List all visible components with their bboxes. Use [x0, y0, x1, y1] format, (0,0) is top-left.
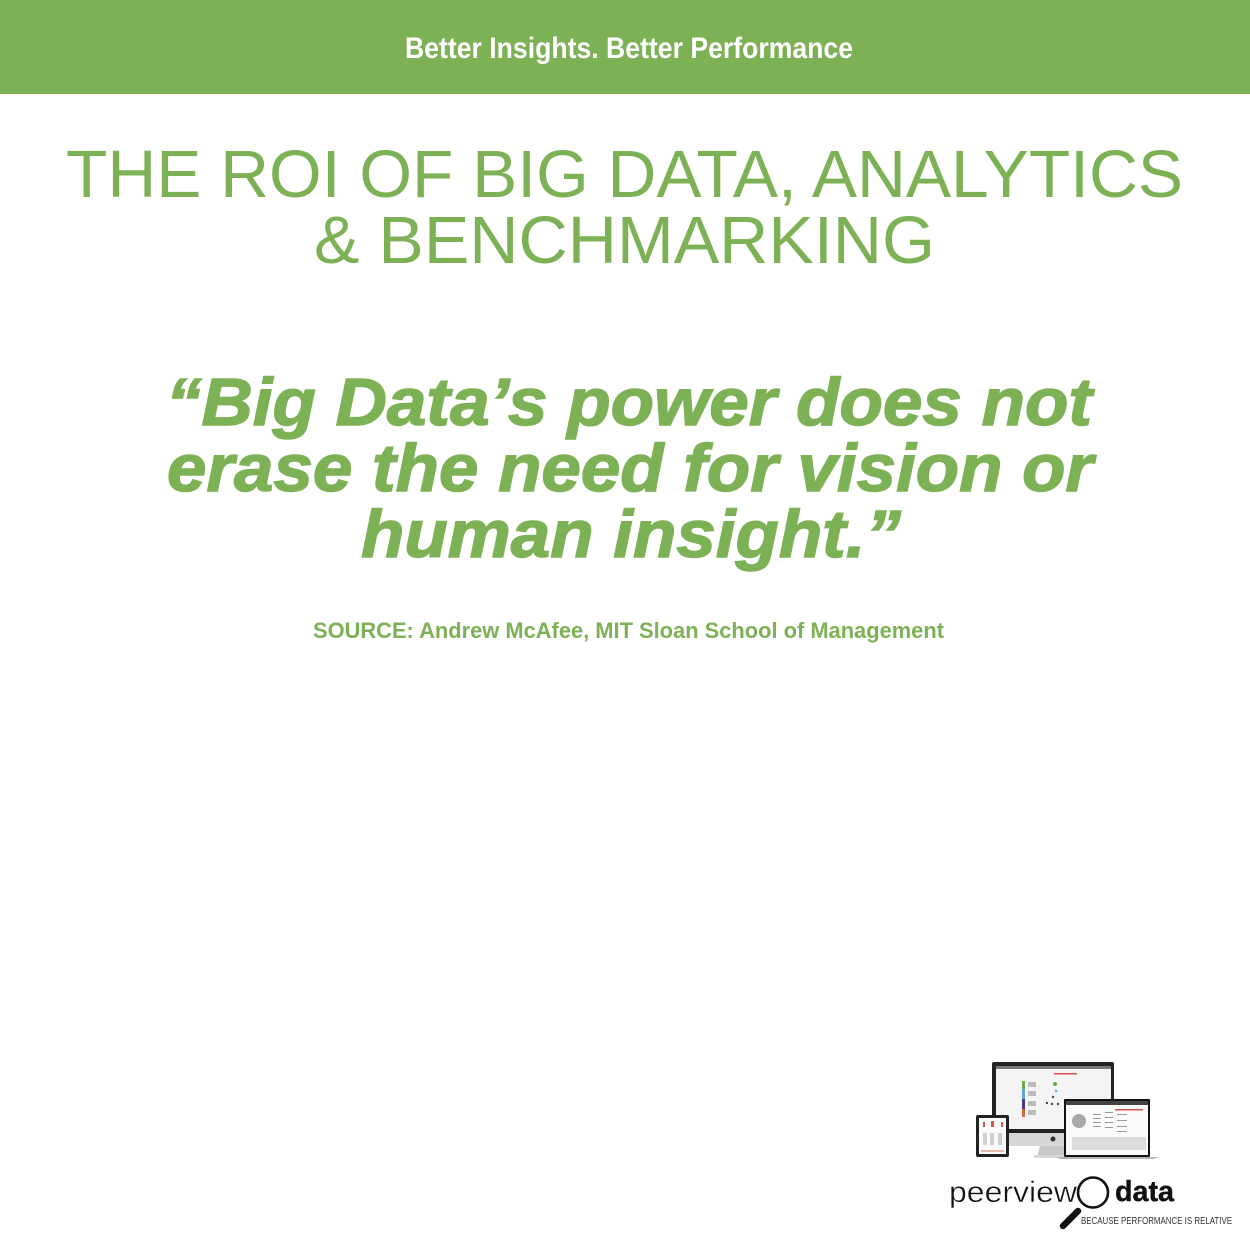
- quote: erase the need for vision or: [167, 431, 1097, 506]
- title: & BENCHMARKING: [314, 203, 935, 278]
- header banner: Better Insights. Better Performance: [405, 32, 853, 65]
- quote: “Big Data’s power does not: [166, 365, 1095, 440]
- title: THE ROI OF BIG DATA, ANALYTICS: [66, 137, 1183, 212]
- header banner: [0, 0, 1250, 94]
- icon: magnifying glass: [1063, 1178, 1108, 1226]
- logo: devices and peerview data wordmark: [949, 1062, 1232, 1227]
- icon: laptop: [1055, 1099, 1159, 1159]
- quote: [166, 365, 1097, 572]
- title: [66, 137, 1183, 278]
- source attribution: SOURCE: Andrew McAfee, MIT Sloan School of Management: [313, 618, 945, 643]
- icon: desktop monitor: [992, 1062, 1114, 1158]
- wordmark: data: data: [1115, 1176, 1175, 1208]
- icon: tablet: [976, 1115, 1009, 1157]
- wordmark: peerview: peerview: [949, 1176, 1077, 1209]
- quote: human insight.”: [361, 497, 902, 572]
